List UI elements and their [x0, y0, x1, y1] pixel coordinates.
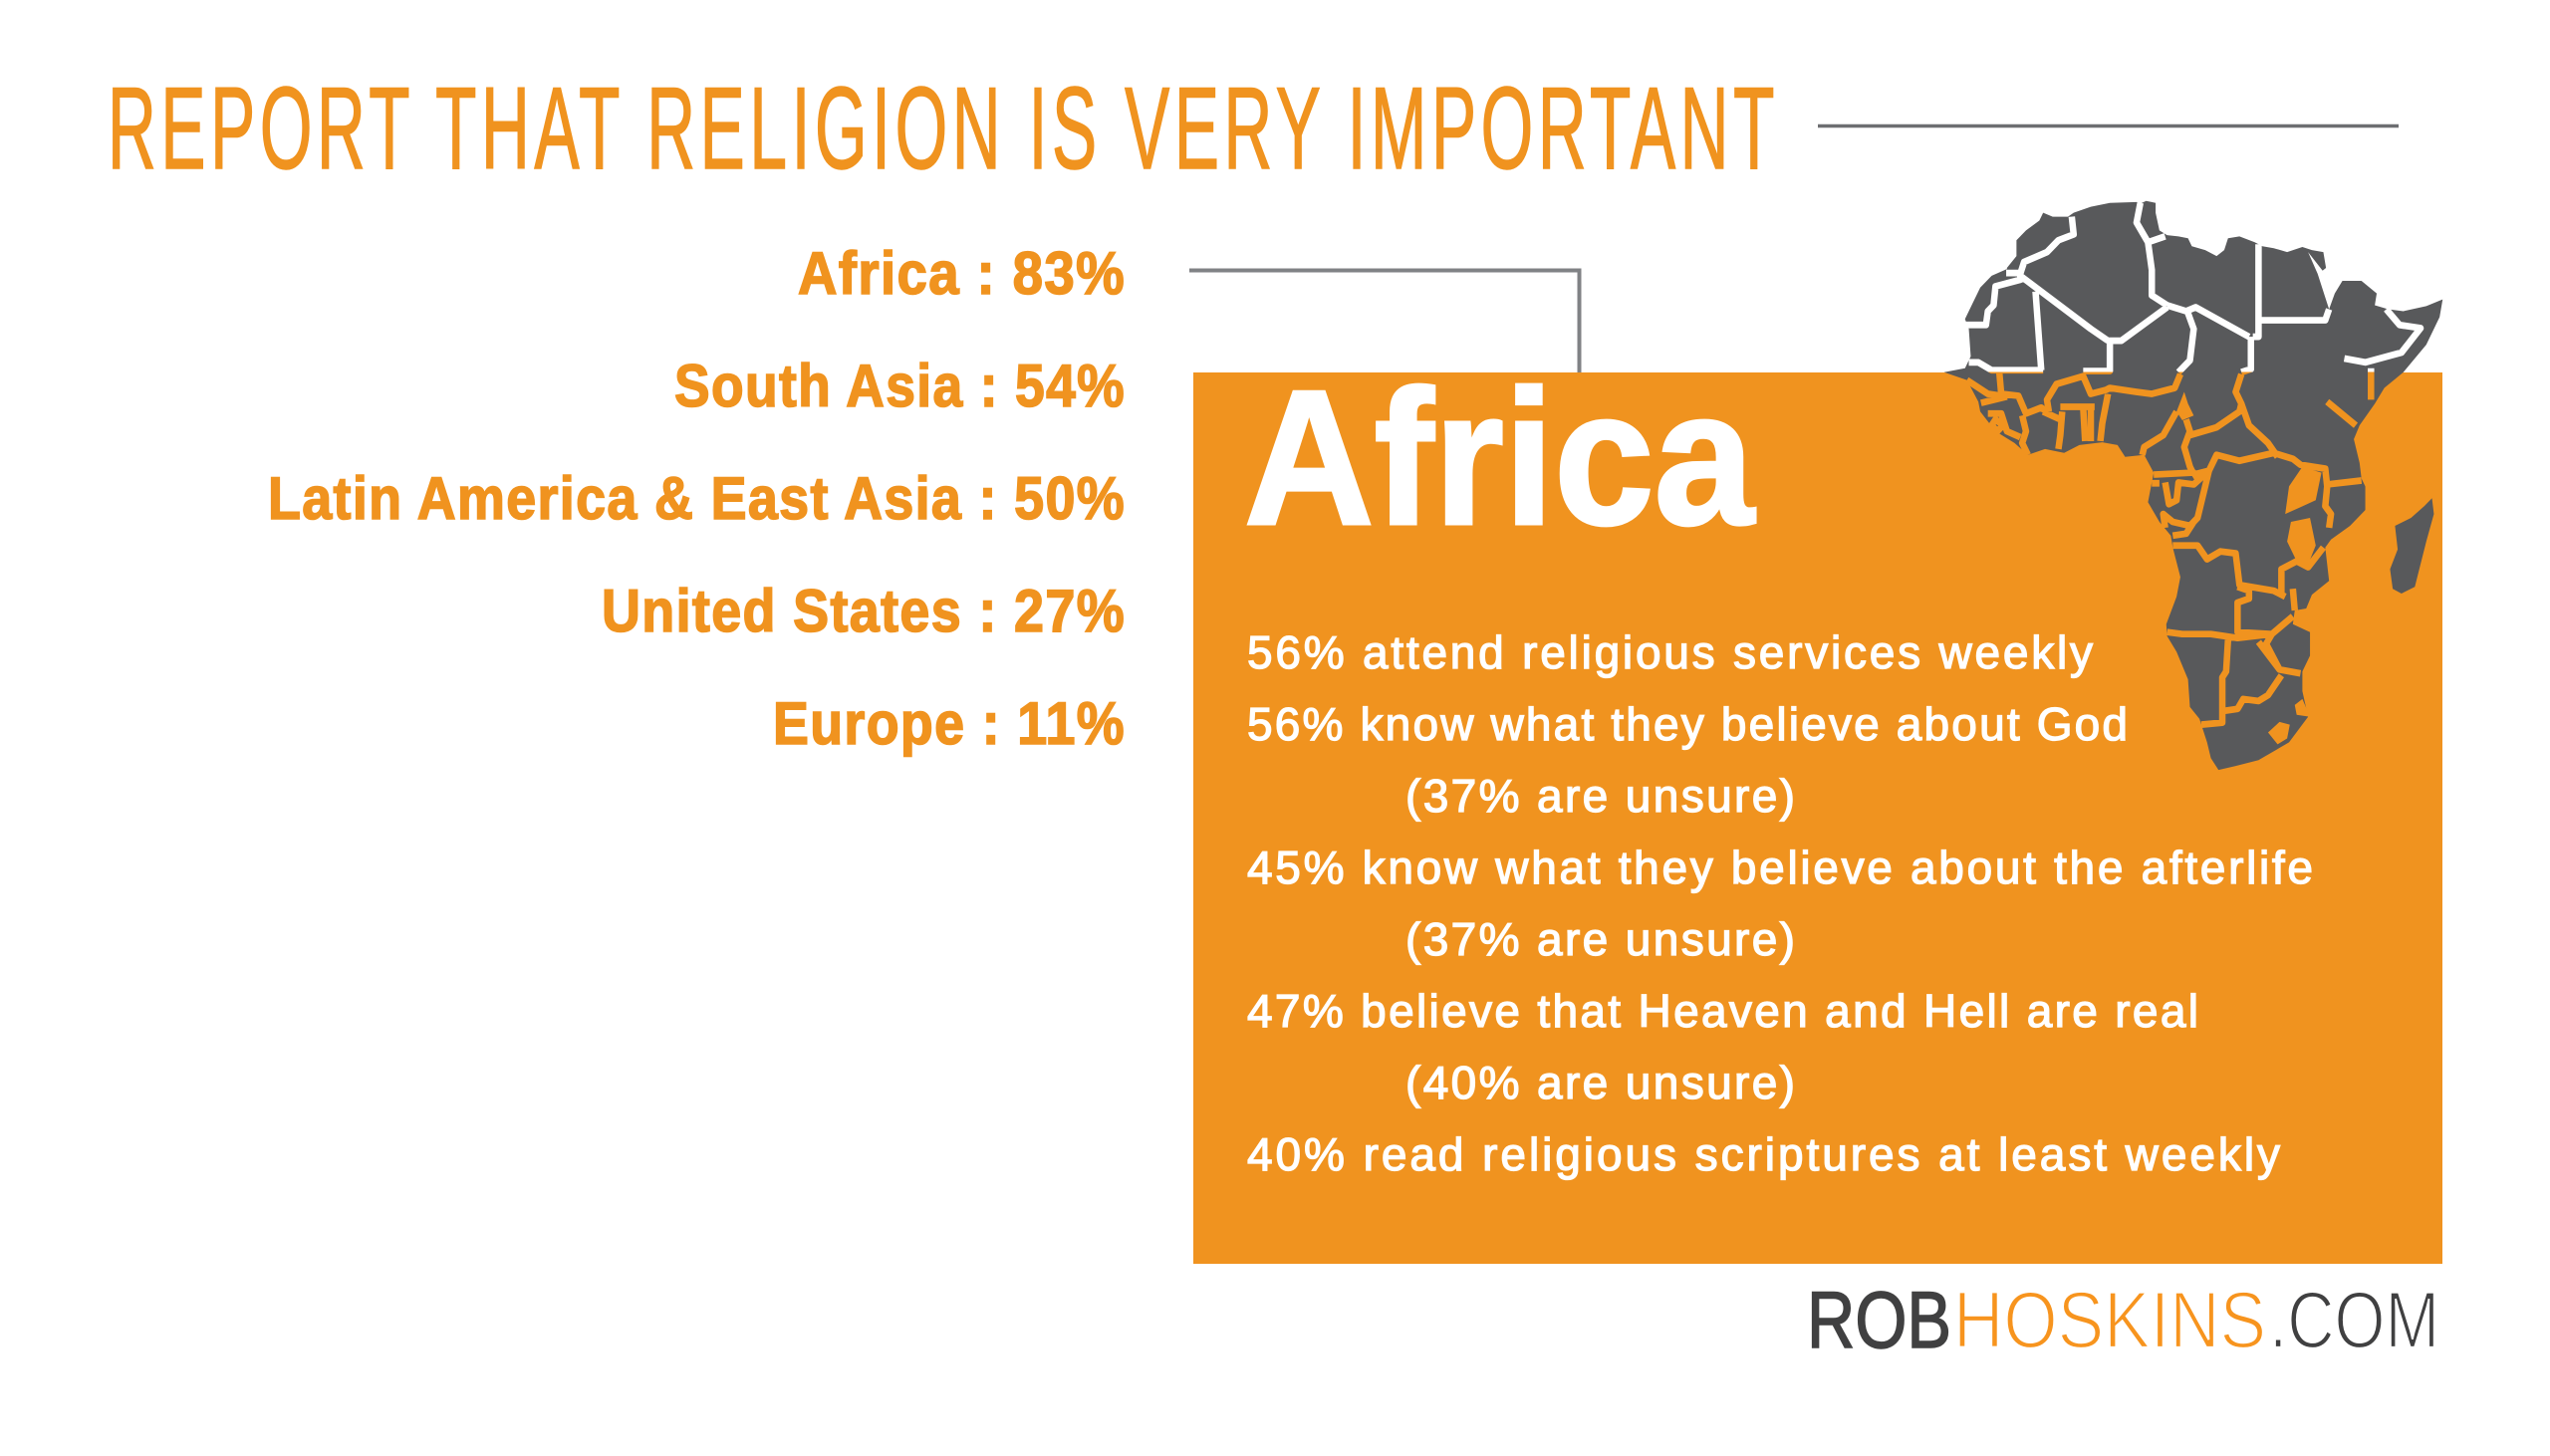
footer logo: robhoskins.com: HOSKINS: [1953, 1276, 2266, 1365]
footer logo: robhoskins.com: [1807, 1276, 2439, 1365]
item: Europe: Europe : 11%: [773, 690, 1126, 757]
country borders: [1965, 203, 2421, 725]
regional percentages list: [268, 240, 1126, 757]
panel statistics text: 40% read religious scriptures at least weekly: [1247, 1128, 2280, 1180]
footer logo: robhoskins.com: .COM: [2269, 1276, 2439, 1365]
panel statistics text: 56% attend religious services weekly: [1247, 626, 2093, 678]
panel statistics text: 56% know what they believe about God: [1247, 698, 2128, 750]
icon: map of Africa: [1944, 201, 2442, 770]
panel statistics text: (37% are unsure): [1405, 913, 1795, 965]
footer logo: robhoskins.com: ROB: [1807, 1276, 1951, 1365]
lakes: [2176, 392, 2322, 744]
connector line from Africa item to panel: [1189, 271, 1580, 372]
panel statistics text: (37% are unsure): [1405, 770, 1795, 822]
panel statistics text: [1247, 626, 2313, 1180]
panel statistics text: (40% are unsure): [1405, 1057, 1795, 1108]
panel statistics text: 45% know what they believe about the afterlife: [1247, 842, 2313, 893]
Madagascar: [2390, 498, 2433, 594]
item: United States: United States : 27%: [602, 578, 1126, 644]
title rule: [1818, 124, 2399, 127]
item: South Asia: South Asia : 54%: [674, 353, 1126, 419]
panel: Africa: [1193, 372, 2442, 1264]
panel statistics text: 47% believe that Heaven and Hell are real: [1247, 985, 2198, 1037]
panel heading: Africa: [1244, 350, 1756, 565]
item: Latin America and East Asia: Latin America & East Asia : 50%: [268, 465, 1126, 532]
mainland: [1944, 201, 2442, 770]
item: Africa: Africa : 83%: [798, 240, 1126, 307]
